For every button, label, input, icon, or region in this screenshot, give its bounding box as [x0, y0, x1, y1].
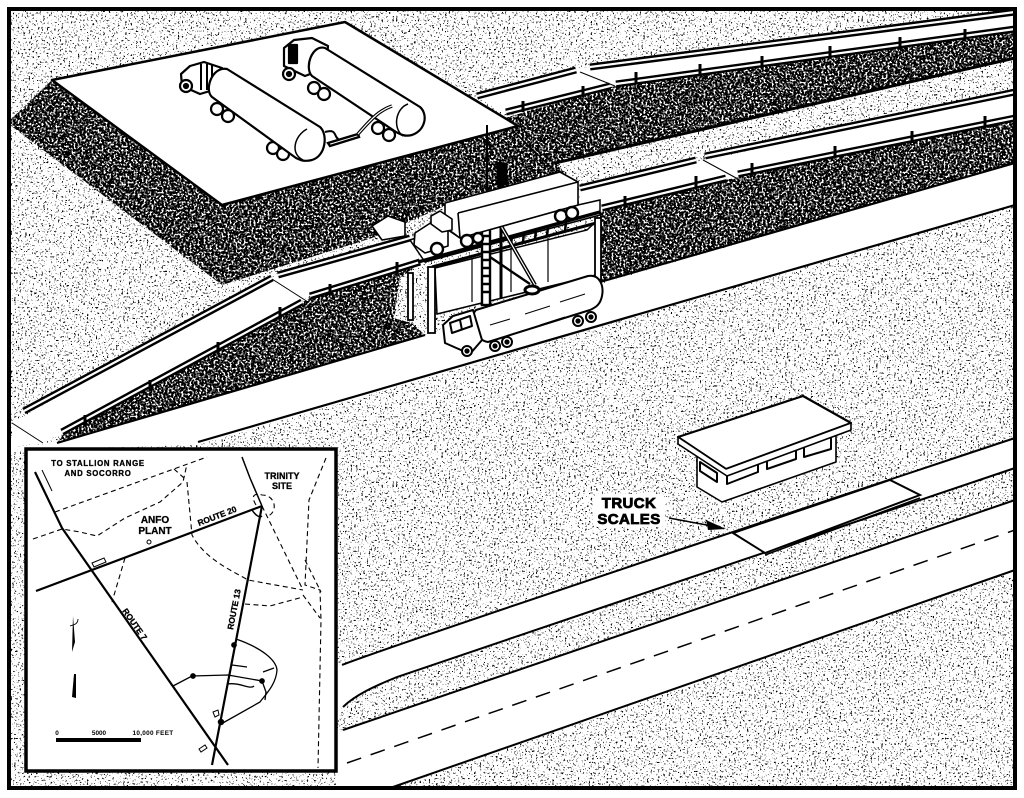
cab	[443, 310, 482, 354]
label: route 13: ROUTE 13	[225, 588, 243, 630]
map: roads	[35, 457, 262, 765]
label: route 7: ROUTE 7	[120, 606, 150, 642]
label: trinity site: TRINITY	[264, 471, 300, 481]
label: trinity site second line: SITE	[272, 481, 292, 491]
route 7	[35, 472, 228, 765]
label: truck scales second line: SCALES	[597, 511, 661, 528]
cab	[284, 38, 328, 76]
wheels	[308, 82, 320, 94]
scale lip	[765, 498, 920, 555]
label: destination: TO STALLION RANGE	[51, 459, 145, 468]
side window	[700, 462, 717, 482]
roof edge	[678, 423, 851, 476]
road: lower-left ramp	[12, 238, 420, 447]
road: middle ramp	[580, 92, 1015, 212]
pad: raised parking pad top	[52, 22, 518, 205]
map: haul roads and dots	[173, 639, 277, 725]
truck: semi on bridge	[372, 172, 578, 255]
scale value: zero: 0	[55, 730, 59, 737]
scale house	[678, 396, 851, 502]
label: destination second line: AND SOCORRO	[64, 469, 132, 478]
label halo: truck scales	[593, 494, 665, 527]
front windows	[727, 461, 758, 484]
map: dashed tracks	[33, 457, 326, 768]
arrow: to truck scales	[669, 518, 726, 530]
bridge	[393, 200, 601, 333]
wheels	[431, 207, 578, 255]
scale value: 10000: 10,000 FEET	[133, 730, 173, 737]
road: lower highway	[336, 500, 1015, 787]
truck: tanker on pad, right	[283, 38, 425, 141]
wheels	[462, 346, 472, 356]
truck: tanker under the bridge	[443, 276, 602, 356]
label: truck scales: TRUCK	[602, 495, 656, 512]
label: anfo plant: ANFO	[141, 515, 169, 526]
truck: tanker on pad, left	[180, 62, 325, 161]
tank	[309, 48, 425, 136]
guard rails	[24, 12, 1015, 432]
road: upper ramp	[477, 12, 1015, 114]
mast: fill tower and loading boom	[482, 125, 556, 305]
walls	[697, 430, 836, 502]
bridge: opening wall	[435, 218, 600, 314]
map: scale bar	[55, 730, 173, 742]
roof	[678, 396, 851, 469]
bridge: pillars	[408, 218, 601, 333]
wheels	[211, 103, 223, 115]
label: route 20: ROUTE 20	[196, 504, 238, 528]
map: facility markers	[92, 540, 219, 752]
road: white shoulder below the bridge	[10, 163, 1015, 450]
embankments: dark stipple slopes	[10, 30, 1015, 443]
shoulder edge lines	[57, 58, 1015, 443]
tank	[472, 276, 602, 342]
hose: pump between tankers	[325, 106, 392, 146]
map: trail arrow	[42, 470, 52, 491]
bridge: light stipple abutment	[393, 268, 436, 333]
cab	[181, 62, 222, 94]
cabs	[372, 216, 405, 240]
label: anfo plant second line: PLANT	[138, 526, 172, 537]
road: lower access road	[336, 438, 1015, 712]
scale value: 5000: 5000	[92, 730, 107, 737]
bridge: deck	[410, 200, 600, 302]
road: centre dashed line	[347, 530, 1015, 763]
route 13	[212, 506, 262, 765]
scale platform	[733, 480, 920, 553]
manhole	[525, 286, 539, 294]
map: north arrow	[70, 616, 78, 698]
route 20	[36, 506, 262, 591]
tank	[209, 69, 325, 161]
road edge lines	[342, 438, 1015, 787]
map labels	[51, 459, 300, 642]
panel: inset map	[26, 449, 336, 771]
bridge: abutment stipple	[393, 268, 436, 333]
trailer box	[445, 172, 578, 238]
